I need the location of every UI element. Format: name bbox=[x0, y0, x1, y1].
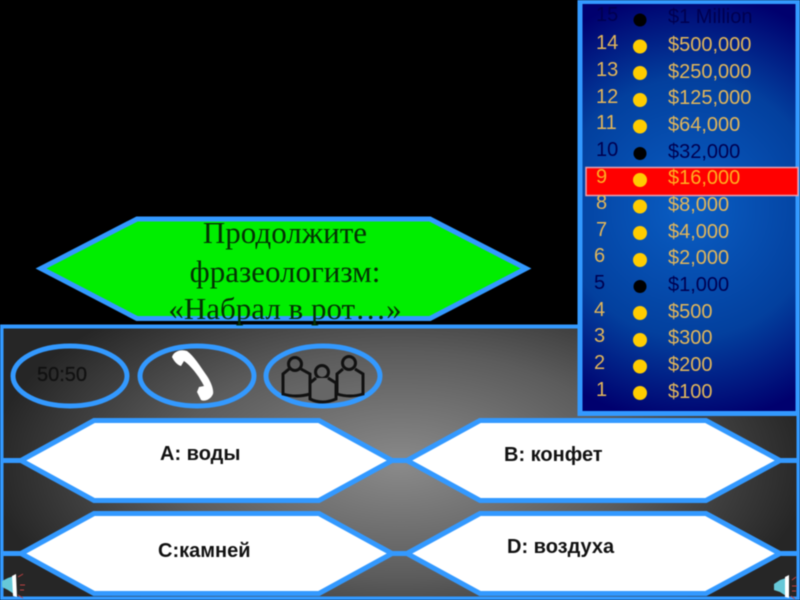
prize amounts: $100 bbox=[668, 381, 712, 403]
prize amounts: $250,000 bbox=[668, 61, 751, 83]
answer D: D: воздуха bbox=[507, 536, 615, 558]
prize amounts: $2,000 bbox=[668, 247, 729, 269]
lifeline: 50:50 bbox=[13, 346, 127, 406]
prize amounts: $1 Million bbox=[668, 6, 752, 28]
level numbers: 1 bbox=[596, 379, 607, 401]
level numbers: 12 bbox=[596, 86, 618, 108]
current level highlight bbox=[586, 168, 798, 196]
prize amounts: $1,000 bbox=[668, 274, 729, 296]
prize amounts: $500 bbox=[668, 301, 712, 323]
level numbers: 11 bbox=[596, 112, 617, 134]
prize amounts: $64,000 bbox=[668, 114, 740, 136]
prize amounts: $200 bbox=[668, 354, 712, 376]
question text: Продолжите bbox=[203, 215, 367, 250]
prize amounts: $8,000 bbox=[668, 194, 729, 216]
icon: speaker right bbox=[774, 575, 797, 599]
question text bbox=[168, 215, 402, 326]
answer C bbox=[21, 514, 392, 594]
level numbers: 5 bbox=[594, 272, 605, 294]
lifeline: 50:50: 50:50 bbox=[37, 364, 87, 386]
answer B bbox=[407, 420, 780, 500]
level numbers: 8 bbox=[596, 192, 607, 214]
answer B: В: конфет bbox=[504, 444, 603, 466]
answer A bbox=[21, 420, 392, 500]
answer D bbox=[407, 514, 780, 594]
lifeline: ask the audience bbox=[266, 346, 380, 406]
prize amounts: $16,000 bbox=[668, 167, 740, 189]
level numbers: 13 bbox=[596, 59, 618, 81]
panel: prize ladder bbox=[580, 2, 798, 414]
question text: фразеологизм: bbox=[190, 254, 380, 289]
prize amounts bbox=[668, 6, 752, 403]
prize amounts: $500,000 bbox=[668, 34, 751, 56]
question hexagon bbox=[41, 215, 526, 326]
level numbers: 7 bbox=[596, 219, 607, 241]
lifeline: phone bbox=[140, 346, 254, 406]
level numbers: 6 bbox=[594, 245, 605, 267]
icon: speaker left bbox=[2, 574, 25, 598]
prize amounts: $32,000 bbox=[668, 141, 740, 163]
level numbers: 9 bbox=[596, 166, 607, 188]
panel: lifelines and answers bbox=[0, 326, 800, 598]
level numbers: 2 bbox=[594, 352, 605, 374]
answer C: С:камней bbox=[158, 540, 251, 562]
prize amounts: $300 bbox=[668, 327, 712, 349]
level numbers: 3 bbox=[594, 325, 605, 347]
level dots bbox=[633, 14, 647, 400]
question text: «Набрал в рот…» bbox=[168, 291, 402, 326]
level numbers: 4 bbox=[594, 299, 605, 321]
level numbers: 15 bbox=[596, 4, 618, 26]
prize amounts: $125,000 bbox=[668, 87, 751, 109]
level numbers: 14 bbox=[596, 32, 618, 54]
level numbers: 10 bbox=[596, 139, 618, 161]
prize amounts: $4,000 bbox=[668, 221, 729, 243]
level numbers bbox=[594, 4, 618, 401]
answer A: А: воды bbox=[160, 443, 240, 465]
